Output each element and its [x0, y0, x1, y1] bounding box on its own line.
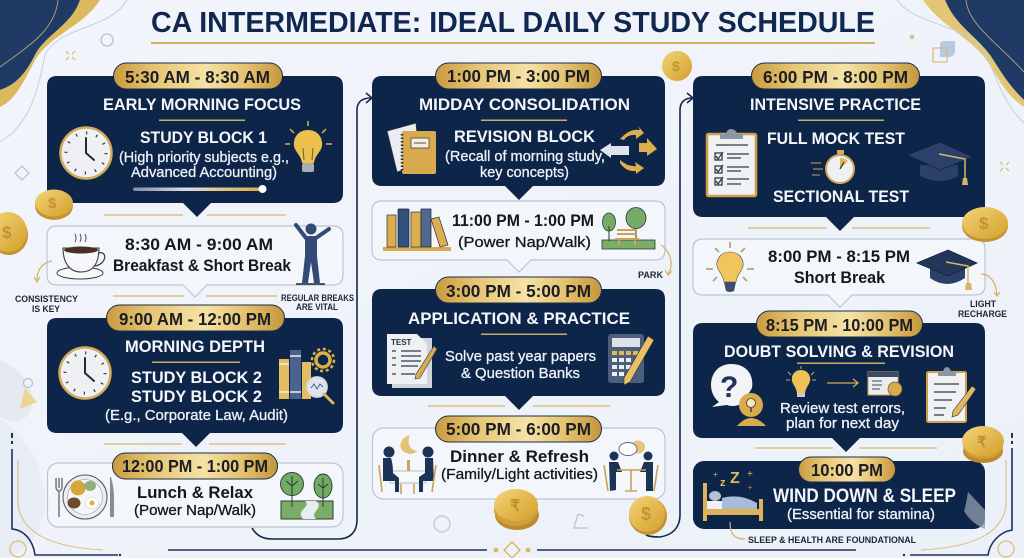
panel: early morning focus: STUDY BLOCK 1: [140, 129, 267, 147]
icon: clock: [60, 128, 112, 178]
icon: test paper and pencil: [387, 334, 437, 388]
panel: intensive practice: INTENSIVE PRACTICE: [750, 95, 921, 114]
panel: doubt solving and revision: DOUBT SOLVING & REVISION: [724, 342, 954, 361]
panel: wind down and sleep: WIND DOWN & SLEEP: [773, 486, 956, 507]
connector arrow: column 2 to column 3: [646, 93, 693, 537]
gold dividers: panel 3: [104, 443, 286, 445]
icon: bed with sleeping zs: +: [748, 485, 752, 492]
icon: graduation cap: [917, 250, 977, 290]
panel: application and practice: [372, 277, 665, 410]
panel: morning depth: (E.g., Corporate Law, Audit): [105, 408, 288, 424]
note: consistency is key: [15, 294, 78, 314]
note: sleep and health are foundational: [730, 522, 916, 545]
panel: doubt solving and revision: 8:15 PM - 10:00 PM: [766, 315, 913, 335]
small arrow: consistency: [34, 261, 52, 282]
panel: lunch and relax: 12:00 PM - 1:00 PM: [122, 456, 268, 476]
panel: wind down and sleep: (Essential for stamina): [787, 507, 935, 523]
icon: dinner couple with moon: [379, 435, 436, 494]
panel: midday consolidation: MIDDAY CONSOLIDATION: [419, 95, 630, 114]
note: regular breaks are vital: REGULAR BREAKS: [281, 293, 354, 303]
icon: clipboard checklist: [707, 129, 756, 196]
note: regular breaks are vital: ARE VITAL: [296, 302, 338, 312]
panel: breakfast and short break: [47, 224, 343, 297]
decorative bottom-left frame: [10, 433, 121, 557]
icon: bed with sleeping zs: +: [713, 470, 718, 479]
coin: [629, 496, 667, 535]
panel: early morning focus: [47, 63, 343, 217]
icon: graduation cap: [907, 142, 973, 185]
note: sleep and health are foundational: SLEEP & HEALTH ARE FOUNDATIONAL: [748, 535, 916, 545]
progress bar: [133, 185, 266, 193]
icon: clock: [60, 348, 110, 398]
decorative top-left corner wave: [0, 0, 127, 142]
icon: trees and path: [280, 472, 333, 519]
panel: doubt solving and revision: [693, 311, 985, 452]
gold dividers: panel 9: [755, 447, 937, 449]
panel: evening short break: Short Break: [794, 269, 886, 287]
icon: stopwatch: [811, 150, 854, 183]
panel: application and practice: Solve past year papers: [445, 349, 596, 365]
icon: test paper and pencil: TEST: [391, 338, 412, 347]
panel: midday consolidation: [372, 63, 665, 200]
gold dividers: panel 2: [113, 295, 277, 297]
panel: breakfast and short break: Breakfast & Short Break: [113, 257, 292, 275]
icon: question bubble: [711, 364, 766, 426]
panel: wind down and sleep: [693, 457, 985, 529]
note: park: PARK: [638, 270, 663, 280]
panel: lunch and relax: (Power Nap/Walk): [134, 502, 256, 519]
panel: dinner and refresh: 5:00 PM - 6:00 PM: [446, 419, 591, 439]
coin: [962, 207, 1008, 242]
coin: $: [641, 504, 651, 524]
icon: calculator and pen: [608, 334, 654, 385]
coin stack: rupee: ₹: [510, 498, 520, 515]
gold dividers: panel 1: [104, 214, 286, 216]
panel: morning depth: MORNING DEPTH: [125, 337, 265, 356]
panel: power nap light card: [372, 201, 665, 272]
note: consistency is key: IS KEY: [32, 304, 60, 314]
decorative left soft shapes: [0, 360, 45, 558]
panel: early morning focus: 5:30 AM - 8:30 AM: [125, 67, 270, 87]
icon: plate with fork and knife: [56, 475, 114, 519]
decorative top-right corner wave: [897, 0, 1024, 123]
panel: midday consolidation: REVISION BLOCK: [454, 128, 595, 146]
panel: midday consolidation: key concepts): [480, 165, 569, 181]
icon: friends talking at table: [604, 440, 658, 491]
panel: wind down and sleep: 10:00 PM: [811, 460, 883, 480]
icon: books with gear and magnifier: [279, 349, 334, 403]
panel: dinner and refresh: [372, 416, 665, 499]
panel: evening short break: [693, 239, 985, 307]
panel: evening short break: 8:00 PM - 8:15 PM: [768, 248, 910, 266]
small arrow: park: [661, 245, 672, 275]
coin stack: rupee: [962, 426, 1004, 463]
icon: clipboard with pen: [927, 367, 976, 422]
panel: lunch and relax: Lunch & Relax: [137, 484, 254, 502]
coin stack: rupee: ₹: [977, 434, 987, 451]
panel: lunch and relax: [48, 453, 343, 527]
note: light recharge: [958, 299, 1007, 319]
title: CA INTERMEDIATE: IDEAL DAILY STUDY SCHEDULE: [151, 7, 875, 39]
panel: morning depth: 9:00 AM - 12:00 PM: [119, 309, 271, 329]
coin: [35, 190, 73, 220]
panel: application and practice: APPLICATION & PRACTICE: [408, 309, 630, 328]
panel: dinner and refresh: Dinner & Refresh: [450, 448, 589, 466]
note: consistency is key: CONSISTENCY: [15, 294, 78, 304]
icon: bed with sleeping zs: z: [720, 477, 726, 489]
coin: $: [672, 58, 680, 74]
panel: dinner and refresh: (Family/Light activities): [441, 466, 598, 483]
note: regular breaks are vital: [281, 293, 354, 312]
bottom divider with diamond: [168, 542, 856, 558]
gold dividers: panel 7: [748, 227, 930, 229]
panel: application and practice: & Question Banks: [461, 366, 580, 382]
gold dividers: panel 5: [428, 405, 610, 407]
icon: revision arrows: [600, 126, 657, 174]
panel: doubt solving and revision: Review test errors,: [780, 401, 905, 417]
icon: bed with sleeping zs: +: [747, 469, 753, 480]
panel: breakfast and short break: 8:30 AM - 9:00 AM: [125, 236, 273, 254]
panel: morning depth: [47, 305, 343, 447]
panel: early morning focus: Advanced Accounting): [131, 165, 277, 181]
icon: light bulb: [706, 242, 754, 292]
icon: light bulb: [285, 121, 332, 172]
panel: intensive practice: [693, 63, 985, 231]
panel: morning depth: STUDY BLOCK 2: [131, 388, 262, 406]
panel: intensive practice: FULL MOCK TEST: [767, 130, 905, 148]
icon: park bench and trees: [602, 208, 655, 249]
coin: $: [979, 214, 989, 233]
panel: power nap light card: 11:00 PM - 1:00 PM: [452, 212, 594, 230]
icon: question bubble: ?: [720, 371, 738, 404]
coin: $: [2, 223, 12, 242]
note: light recharge: RECHARGE: [958, 309, 1007, 319]
coin: [0, 212, 28, 255]
icon: bed with sleeping zs: Z: [730, 470, 740, 487]
icon: bulb to calendar: [786, 366, 902, 397]
small arrow: light recharge: [981, 274, 1000, 296]
decorative bottom-right frame: [903, 433, 1014, 557]
icon: book shelf: [383, 209, 451, 251]
icon: bed with sleeping zs: [703, 469, 763, 521]
panel: early morning focus: (High priority subjects e.g.,: [119, 150, 289, 166]
panel: doubt solving and revision: plan for next day: [786, 416, 900, 432]
panel: power nap light card: (Power Nap/Walk): [458, 234, 591, 251]
icon: notebooks: [387, 123, 436, 174]
panel: morning depth: STUDY BLOCK 2: [131, 369, 262, 387]
panel: intensive practice: 6:00 PM - 8:00 PM: [763, 67, 908, 87]
panel: application and practice: 3:00 PM - 5:00 PM: [446, 281, 591, 301]
icon: stretching person: [296, 224, 329, 284]
icon: coffee cup: [57, 234, 105, 279]
coin: [662, 51, 692, 81]
coin: $: [48, 195, 57, 212]
note: light recharge: LIGHT: [970, 299, 996, 309]
panel: intensive practice: SECTIONAL TEST: [773, 188, 909, 206]
panel: early morning focus: EARLY MORNING FOCUS: [103, 95, 301, 114]
panel: midday consolidation: (Recall of morning study,: [445, 149, 605, 165]
coin stack: rupee: [494, 489, 539, 530]
panel: midday consolidation: 1:00 PM - 3:00 PM: [447, 66, 590, 86]
connector arrow: column 1 to column 2: [252, 93, 372, 539]
